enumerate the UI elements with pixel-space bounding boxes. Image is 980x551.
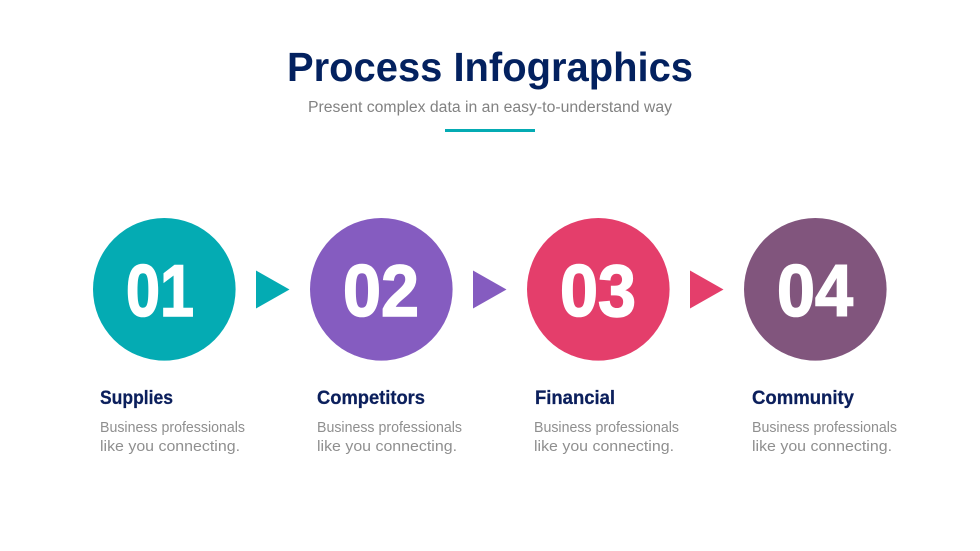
description: competitors: like you connecting. [317,438,457,455]
heading: financial: Financial [535,388,615,409]
title: Process Infographics [287,44,693,90]
step 1: supplies [93,218,245,455]
description: supplies: Business professionals [100,419,245,436]
heading: supplies: Supplies [100,388,173,409]
number badge 01: 01 [126,251,194,332]
number badge 02 [310,218,453,361]
number badge 03 [527,218,670,361]
description: community: Business professionals [752,419,897,436]
number badge 04: 04 [777,251,853,332]
title underline accent [445,129,535,132]
arrow: step 2 to 3 [473,270,506,308]
number badge 01 [93,218,236,361]
description: community [752,419,897,455]
number badge 04 [744,218,887,361]
description: financial: like you connecting. [534,438,674,455]
description: financial: Business professionals [534,419,679,436]
step 3: financial [527,218,679,455]
description: supplies [100,419,245,455]
subtitle: Present complex data in an easy-to-understand way [308,99,672,116]
step 2: competitors [310,218,462,455]
arrow: step 1 to 2 [256,270,290,308]
heading: competitors: Competitors [317,388,425,409]
description: supplies: like you connecting. [100,438,240,455]
arrow: step 3 to 4 [690,270,724,308]
description: competitors: Business professionals [317,419,462,436]
number badge 03: 03 [560,251,636,332]
description: competitors [317,419,462,455]
description: community: like you connecting. [752,438,892,455]
heading: community: Community [752,388,854,409]
step 4: community [744,218,897,455]
description: financial [534,419,679,455]
number badge 02: 02 [343,251,419,332]
